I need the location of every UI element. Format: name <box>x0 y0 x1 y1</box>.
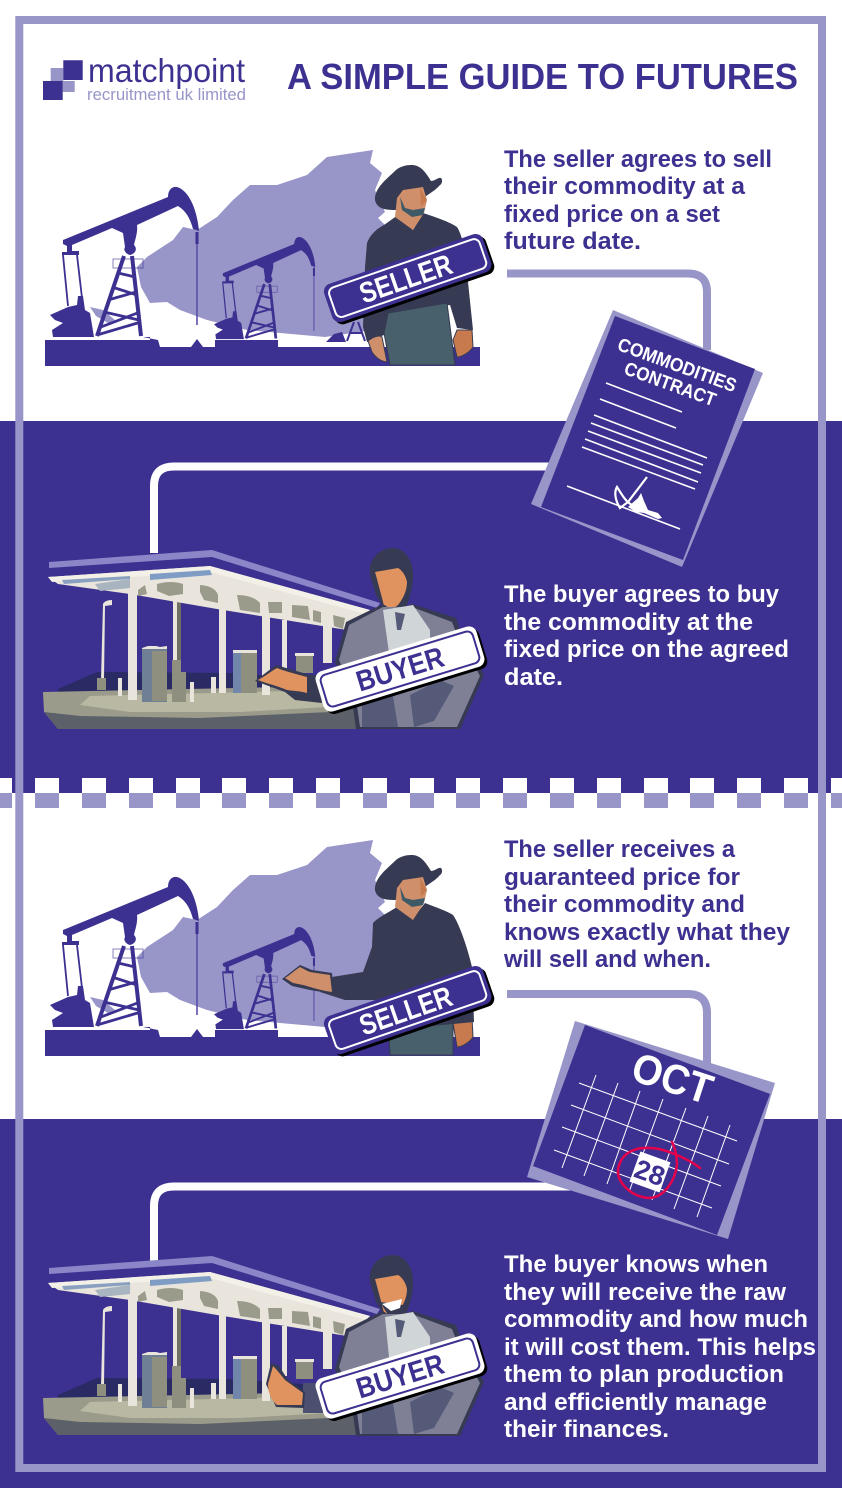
logo mark <box>51 68 75 92</box>
text block: seller agrees: The seller agrees to sell <box>504 146 772 173</box>
month label: OCT <box>626 1043 719 1113</box>
text block: seller agrees: their commodity at a <box>504 173 746 200</box>
contract document: CONTRACT <box>621 359 719 411</box>
text block: seller receives: The seller receives a <box>504 836 736 863</box>
badge: buyer 2: BUYER <box>353 1348 448 1405</box>
logo: matchpoint <box>88 52 245 89</box>
text block: buyer knows: it will cost them. This helps <box>504 1334 816 1361</box>
text block: buyer agrees: date. <box>504 664 563 691</box>
purple background section <box>0 421 842 793</box>
text block: buyer agrees <box>504 581 789 691</box>
text block: buyer knows: them to plan production <box>504 1361 784 1388</box>
text block: buyer knows: they will receive the raw <box>504 1279 786 1306</box>
badge: buyer 1 <box>314 624 489 717</box>
gas station scene 1 <box>43 550 380 729</box>
badge: buyer 1: BUYER <box>353 641 448 698</box>
highlighted date: 28 <box>630 1154 669 1192</box>
seller figure 2 <box>282 855 474 1055</box>
oil field scene 2 <box>45 840 480 1056</box>
text block: buyer knows <box>504 1251 816 1443</box>
text block: buyer agrees: fixed price on the agreed <box>504 636 789 663</box>
text block: seller receives: knows exactly what they <box>504 919 791 946</box>
buyer figure 1 <box>255 548 484 729</box>
signature <box>615 477 647 508</box>
gas station scene 2 <box>43 1256 380 1435</box>
logo <box>43 52 246 104</box>
text block: seller receives: their commodity and <box>504 891 745 918</box>
oil field scene 1 <box>45 150 480 366</box>
text block: buyer knows: and efficiently manage <box>504 1389 767 1416</box>
connector: seller to calendar <box>507 994 707 1070</box>
text block: buyer knows: commodity and how much <box>504 1306 808 1333</box>
lower white background section <box>0 793 842 1119</box>
contract title: COMMODITIES <box>615 335 739 397</box>
connector: contract to buyer <box>154 466 560 553</box>
white background section <box>0 0 842 421</box>
badge: seller 1 <box>322 231 496 327</box>
badge: buyer 2 <box>314 1331 489 1424</box>
buyer figure 2 <box>266 1255 484 1436</box>
text block: seller agrees: fixed price on a set <box>504 201 720 228</box>
badge: seller 2: SELLER <box>356 981 457 1042</box>
connector: calendar to buyer <box>154 1186 590 1262</box>
text block: seller agrees: future date. <box>504 228 641 255</box>
calendar grid <box>554 1075 737 1217</box>
text block: seller receives: guaranteed price for <box>504 864 740 891</box>
connector: seller to contract <box>507 274 707 350</box>
red circle <box>618 1142 700 1198</box>
calendar <box>527 1021 775 1239</box>
text block: buyer knows: The buyer knows when <box>504 1251 768 1278</box>
title: A SIMPLE GUIDE TO FUTURES <box>287 56 798 97</box>
checkered divider <box>0 778 842 808</box>
logo: recruitment uk limited <box>87 85 246 104</box>
lower purple background section <box>0 1119 842 1488</box>
contract document <box>531 310 763 567</box>
text block: seller receives: will sell and when. <box>503 946 711 973</box>
text block: seller receives <box>503 836 791 973</box>
badge: seller 1: SELLER <box>356 249 457 310</box>
text block: buyer agrees: The buyer agrees to buy <box>504 581 780 608</box>
seller figure 1 <box>363 165 473 365</box>
badge: seller 2 <box>322 963 496 1059</box>
text block: seller agrees <box>504 146 772 255</box>
text block: buyer knows: their finances. <box>504 1416 669 1443</box>
text block: buyer agrees: the commodity at the <box>504 609 753 636</box>
